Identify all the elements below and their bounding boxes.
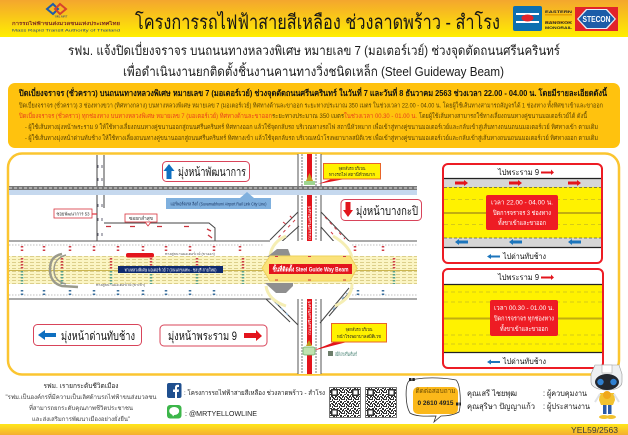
road: Soi Phatthanakan 53: [97, 155, 215, 241]
arrows: westbound: [455, 239, 581, 245]
contact: Surisa: : ผู้ประสานงาน: [543, 402, 590, 412]
direction: Rama 9: [160, 325, 267, 346]
panel: closure 22.00-04.00: [443, 164, 602, 263]
contacts: [467, 389, 590, 412]
text: second closure: โดยผู้ใช้เส้นทางสามารถใช้ทางเลี่ยงถนนทางคู่ขนานมอเตอร์เวย์ได้ ดังนี้: [419, 111, 588, 120]
heading: to Rama 9: ไปพระราม 9: [497, 168, 540, 177]
subtitle: เพื่อดำเนินงานยกติดตั้งชิ้นงานคานทางวิ่งชนิดเหล็ก (Steel Guideway Beam): [123, 62, 504, 79]
logo: Eastern Bangkok Monorail: MONORAIL: [545, 26, 573, 30]
label: Soi Phatthanakan 53: [54, 209, 97, 218]
callout: lower U-turn: [303, 324, 386, 355]
text: second closure: [19, 111, 588, 120]
label: Airport Rail Link: [166, 192, 271, 209]
callout: steel guide way beam: ชิ้นที่ติดตั้ง Steel Guide Way Beam: [272, 264, 349, 274]
label: Airport Rail Link: แอร์พอร์ตเรล ลิงก์ (Suvarnabhumi Airport Rail Link City Line): [170, 200, 267, 208]
callout: contact phone: ติดต่อสอบถาม: [416, 387, 456, 395]
label: Soi Phatthanakan: ซอยกล่ำสุข: [129, 215, 153, 222]
contact: Seri: คุณเสรี ไชยพุฒ: [467, 389, 517, 398]
contact: Seri: [467, 389, 587, 399]
logo: Eastern Bangkok Monorail: BANGKOK: [545, 21, 572, 25]
footer band: [0, 424, 628, 435]
header band: [0, 0, 628, 37]
footer: MRTA statement: "รฟม.เป็นองค์กรที่มีความเป็นเลิศด้านรถไฟฟ้าขนส่งมวลชน: [6, 392, 156, 401]
label: Soi Phatthanakan 53: ซอยพัฒนาการ 53: [56, 212, 90, 218]
road: upper-left ramp: [270, 212, 299, 245]
label: Srinagarindra bottom: ถนนศรีนครินทร์: [307, 301, 312, 335]
logo: MRTA: Mass Rapid Transit Authority of Thailand: [12, 28, 120, 32]
road: lower ramps: [266, 288, 353, 325]
logo: MRTA: รฟม.MRT: [54, 14, 68, 18]
direction: Rama 9: มุ่งหน้าพระราม 9: [168, 329, 237, 344]
callout: lower U-turn: จุดกลับรถ บริเวณ: [346, 326, 373, 333]
text: second closure: ปิดเบี่ยงจราจร (ชั่วคราว) ทุกช่องทาง บนทางหลวงพิเศษ หมายเลข 7 (มอเตอร์เวย์) ทิศทางด้านละขาออก: [19, 111, 272, 120]
icon: facebook: [167, 383, 182, 398]
logo: MRTA: [12, 4, 120, 32]
direction: Phatthanakan: มุ่งหน้าพัฒนาการ: [178, 165, 246, 180]
logo: Eastern Bangkok Monorail: EASTERN: [545, 10, 572, 14]
direction: Phatthanakan: [162, 162, 250, 182]
footer: MRTA statement: ที่สามารถยกระดับคุณภาพชีวิตประชาชน: [29, 404, 133, 412]
label: motorway name: ทางหลวงพิเศษ มอเตอร์เวย์ 7 (ถนนกรุงเทพ - ชลบุรี สายใหม่): [124, 266, 217, 274]
callout: contact phone: [406, 378, 461, 422]
callout: lower U-turn: หน้าโรงพยาบาลสมิติเวช: [337, 333, 381, 339]
beige junction curves: [266, 236, 352, 306]
logo: STECON: [575, 7, 618, 31]
callout: steel guide way beam: [262, 256, 357, 281]
footer: MRTA statement: และส่งเสริมการพัฒนาเมืองอย่างยั่งยืน": [32, 415, 130, 423]
label: Srinagarindra top: ถนนศรีนครินทร์: [307, 206, 312, 240]
notice: closure time: ทั้งขาเข้าและขาออก: [500, 324, 548, 333]
panel: closure 00.30-01.00: [443, 269, 603, 368]
notice: closure time: ปิดการจราจร ทุกช่องทาง: [494, 314, 554, 322]
heading: to Rama 9: ไปพระราม 9: [497, 273, 540, 282]
callout: upper U-turn: [304, 164, 380, 185]
notice: closure time: [490, 300, 558, 336]
label: Samitivej hospital: [328, 351, 357, 358]
direction: Thap Chang: มุ่งหน้าด่านทับช้าง: [61, 329, 135, 344]
mascot: [591, 365, 622, 419]
callout: upper U-turn: จุดกลับรถ บริเวณ: [338, 165, 366, 172]
text: สมิติเวช ศรีนครินทร์: [335, 351, 357, 358]
QR code: right: [366, 388, 396, 418]
text: LINE ID: : @MRTYELLOWLINE: [185, 409, 257, 418]
title: โครงการรถไฟฟ้าสายสีเหลือง ช่วงลาดพร้าว - สำโรง: [135, 11, 500, 34]
panel: closure details: [8, 83, 620, 148]
logo: MRTA: การรถไฟฟ้าขนส่งมวลชนแห่งประเทศไทย: [12, 20, 120, 26]
footer: MRTA statement: รฟม. เรายกระดับชีวิตเมือง: [44, 382, 118, 390]
road: U-turn ramp: [50, 254, 78, 287]
QR code: left: [330, 388, 360, 418]
callout: upper U-turn: ทางรถไฟ สถานีหัวหมาก: [329, 171, 375, 177]
label: motorway name: [118, 266, 223, 274]
ramp: gray flyovers: [265, 249, 293, 293]
subtitle: [68, 42, 560, 79]
footer label: to Thap Chang: [487, 357, 546, 366]
notice: closure time: เวลา 22.00 - 04.00 น.: [491, 200, 553, 206]
footer label: to Thap Chang: ไปด่านทับช้าง: [502, 252, 546, 261]
notice: closure time: ปิดการจราจร 3 ช่องทาง: [493, 209, 551, 217]
footer label: to Thap Chang: ไปด่านทับช้าง: [502, 357, 546, 366]
road: Srinagarindra main road: [298, 154, 321, 374]
label: parallel road north: ทางคู่ขนานมอเตอร์เวย์ (ขาออก): [165, 252, 215, 256]
callout: contact phone: 0 2610 4915: [418, 400, 454, 407]
road lanes: [444, 284, 602, 352]
footer: MRTA statement: [6, 382, 156, 423]
logo: STECON: STECON: [582, 15, 611, 24]
subtitle: รฟม. แจ้งปิดเบี่ยงจราจร บนถนนทางหลวงพิเศษ หมายเลข 7 (มอเตอร์เวย์) ช่วงจุดตัดถนนศรีนครินทร์: [68, 42, 560, 59]
map: road diagram: [9, 154, 417, 374]
label: parallel road south: ทางคู่ขนานมอเตอร์เวย์ (ขาเข้า): [96, 282, 145, 287]
panel: diagram frame: [8, 154, 619, 374]
notice: closure time: [486, 195, 558, 230]
notice: closure time: เวลา 00.30 - 01.00 น.: [494, 305, 554, 312]
road: Airport Rail Link: [9, 186, 417, 195]
text: facebook page: : โครงการรถไฟฟ้าสายสีเหลือง ช่วงลาดพร้าว - สำโรง: [184, 388, 325, 397]
road: motorway: [9, 241, 417, 299]
marker: red closure pill: [126, 253, 154, 258]
icon: LINE: [167, 405, 182, 418]
contact: Surisa: [467, 402, 590, 412]
road: upper-right ramp: [321, 212, 349, 254]
footer label: to Thap Chang: [487, 252, 546, 261]
direction: Bang Kapi: มุ่งหน้าบางกะปิ: [356, 204, 418, 219]
road lanes: [444, 178, 601, 248]
notice: closure time: ทั้งขาเข้าและขาออก: [498, 218, 546, 227]
document code: YEL59/2563: [571, 425, 618, 435]
text: second closure: ระยะทางประมาณ 350 เมตร: [272, 113, 344, 120]
text: second closure: ในช่วงเวลา 00.30 - 01.00 น.: [344, 112, 417, 120]
logo: Eastern Bangkok Monorail: [513, 6, 573, 31]
direction: Thap Chang: [34, 324, 142, 346]
direction: Bang Kapi: [341, 200, 422, 220]
label: Soi Phatthanakan: [125, 214, 157, 226]
contact: Seri: : ผู้ควบคุมงาน: [543, 389, 587, 399]
arrows: eastbound: [455, 180, 581, 186]
contact: Surisa: คุณสุริษา ปัญญาแก้ว: [467, 402, 535, 411]
